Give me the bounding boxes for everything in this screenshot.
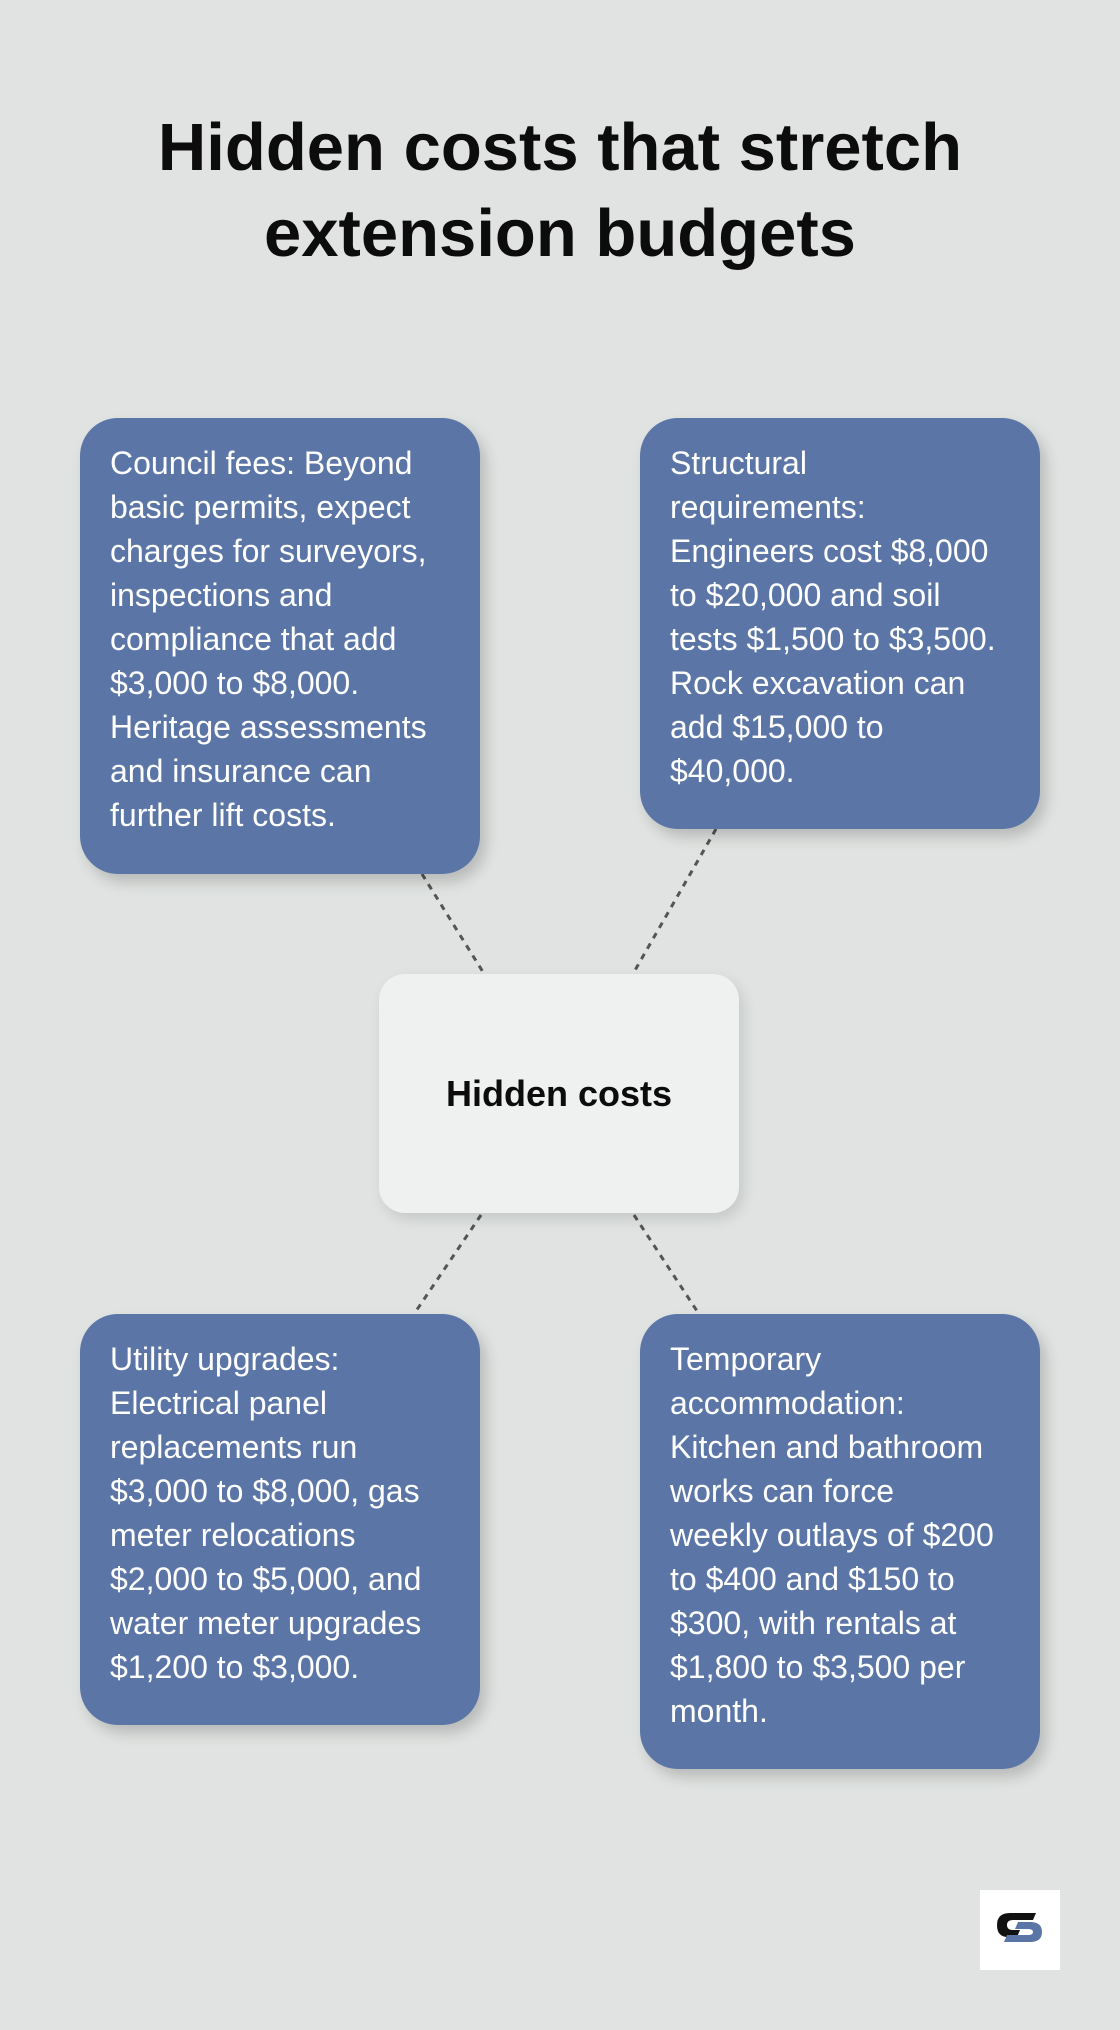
panel: utility upgrades: $3,000 to $8,000, gas: [110, 1473, 420, 1509]
center node: Hidden costs: [446, 1072, 672, 1114]
panel: temporary accommodation: works can force: [670, 1473, 894, 1509]
panel: structural requirements: requirements:: [670, 489, 866, 525]
panel: structural requirements: add $15,000 to: [670, 709, 884, 745]
panel: temporary accommodation: Kitchen and bathroom: [670, 1429, 983, 1465]
panel: structural requirements: Engineers cost $8,000: [670, 533, 988, 569]
panel: structural requirements: [640, 418, 1040, 829]
panel: structural requirements: $40,000.: [670, 753, 795, 789]
panel: temporary accommodation: accommodation:: [670, 1385, 905, 1421]
panel: utility upgrades: water meter upgrades: [110, 1605, 421, 1641]
panel: temporary accommodation: weekly outlays of $200: [670, 1517, 994, 1553]
panel: utility upgrades: Utility upgrades:: [110, 1341, 339, 1377]
logo: [980, 1890, 1060, 1970]
center node: [379, 974, 739, 1213]
title: Hidden costs that stretch: [158, 110, 962, 185]
panel: structural requirements: Structural: [670, 445, 807, 481]
panel: council fees: compliance that add: [110, 621, 396, 657]
panel: council fees: Heritage assessments: [110, 709, 427, 745]
panel: temporary accommodation: [640, 1314, 1040, 1769]
panel: utility upgrades: meter relocations: [110, 1517, 355, 1553]
panel: council fees: [80, 418, 480, 874]
panel: council fees: Council fees: Beyond: [110, 445, 412, 481]
panel: utility upgrades: [80, 1314, 480, 1725]
panel: structural requirements: tests $1,500 to $3,500.: [670, 621, 996, 657]
panel: council fees: inspections and: [110, 577, 332, 613]
panel: council fees: further lift costs.: [110, 797, 336, 833]
panel: council fees: $3,000 to $8,000.: [110, 665, 359, 701]
panel: utility upgrades: Electrical panel: [110, 1385, 327, 1421]
panel: council fees: basic permits, expect: [110, 489, 411, 525]
panel: utility upgrades: $1,200 to $3,000.: [110, 1649, 359, 1685]
panel: temporary accommodation: $300, with rentals at: [670, 1605, 956, 1641]
panel: temporary accommodation: month.: [670, 1693, 768, 1729]
panel: temporary accommodation: to $400 and $150 to: [670, 1561, 955, 1597]
panel: council fees: and insurance can: [110, 753, 372, 789]
panel: utility upgrades: replacements run: [110, 1429, 357, 1465]
title: [158, 110, 962, 271]
title: extension budgets: [264, 196, 856, 271]
panel: temporary accommodation: $1,800 to $3,500 per: [670, 1649, 965, 1685]
panel: council fees: charges for surveyors,: [110, 533, 427, 569]
panel: structural requirements: Rock excavation can: [670, 665, 965, 701]
panel: structural requirements: to $20,000 and soil: [670, 577, 940, 613]
panel: temporary accommodation: Temporary: [670, 1341, 821, 1377]
panel: utility upgrades: $2,000 to $5,000, and: [110, 1561, 421, 1597]
